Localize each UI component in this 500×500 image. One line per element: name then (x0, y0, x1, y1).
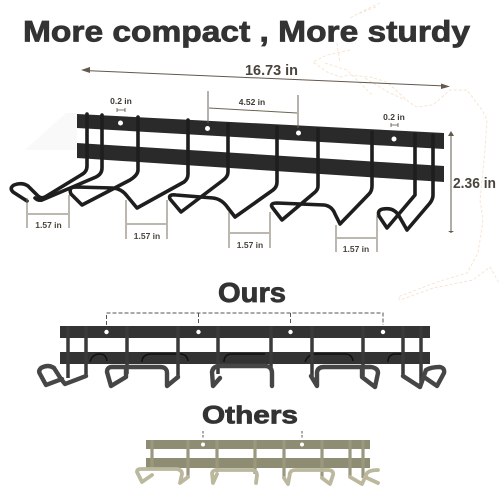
hole spacing dimension: 4.52 in: 4.52 in (239, 97, 265, 107)
heading: Others: Others (202, 402, 298, 430)
others upright wires (152, 440, 363, 478)
hole diameter dimension right: 0.2 in: 0.2 in (383, 112, 405, 122)
heading: Ours: Ours (218, 277, 286, 308)
hook gap dimension 4: 1.57 in (343, 244, 369, 254)
others mounting holes (201, 442, 304, 446)
hole spacing dimension: 4.52 in (208, 91, 298, 128)
ours hook shadows on lower bar (90, 354, 404, 362)
ours upright wires (68, 326, 421, 382)
rack hooks (11, 114, 433, 230)
others hooks (137, 469, 378, 484)
others hole markers (203, 431, 302, 438)
others rack (137, 431, 378, 484)
hook gap dimension 3: 1.57 in (237, 240, 263, 250)
overall width dimension: 16.73 in (81, 63, 450, 89)
ours hooks (39, 366, 444, 387)
height dimension: 2.36 in (448, 131, 496, 233)
hook gap dimension 3 (229, 212, 270, 250)
ours rack (39, 313, 444, 387)
title: More compact , More sturdy (23, 16, 471, 48)
ours mounting holes (104, 330, 385, 334)
hook gap dimension 4 (336, 215, 377, 254)
hook gap dimension 2 (126, 200, 167, 241)
overall width dimension: 16.73 in: 16.73 in (245, 63, 298, 79)
rack mounting holes (118, 120, 396, 142)
hook gap dimension 1 (27, 195, 69, 230)
decorative background: faint dashed map outline (313, 3, 499, 300)
hole diameter dimension left: 0.2 in (110, 96, 132, 112)
hole diameter dimension left: 0.2 in: 0.2 in (110, 96, 132, 106)
ours bars (60, 326, 430, 364)
hook gap dimension 2: 1.57 in (134, 231, 160, 241)
top rack: dimensioned product drawing (11, 63, 496, 254)
hole diameter dimension right: 0.2 in (383, 112, 405, 127)
ours dashed hole connector (106, 313, 383, 325)
others bars (146, 440, 370, 468)
height dimension: 2.36 in: 2.36 in (453, 176, 496, 192)
hook gap dimension 1: 1.57 in (35, 220, 62, 230)
rack mounting bars (77, 114, 444, 182)
decorative rack shadow (25, 113, 77, 150)
